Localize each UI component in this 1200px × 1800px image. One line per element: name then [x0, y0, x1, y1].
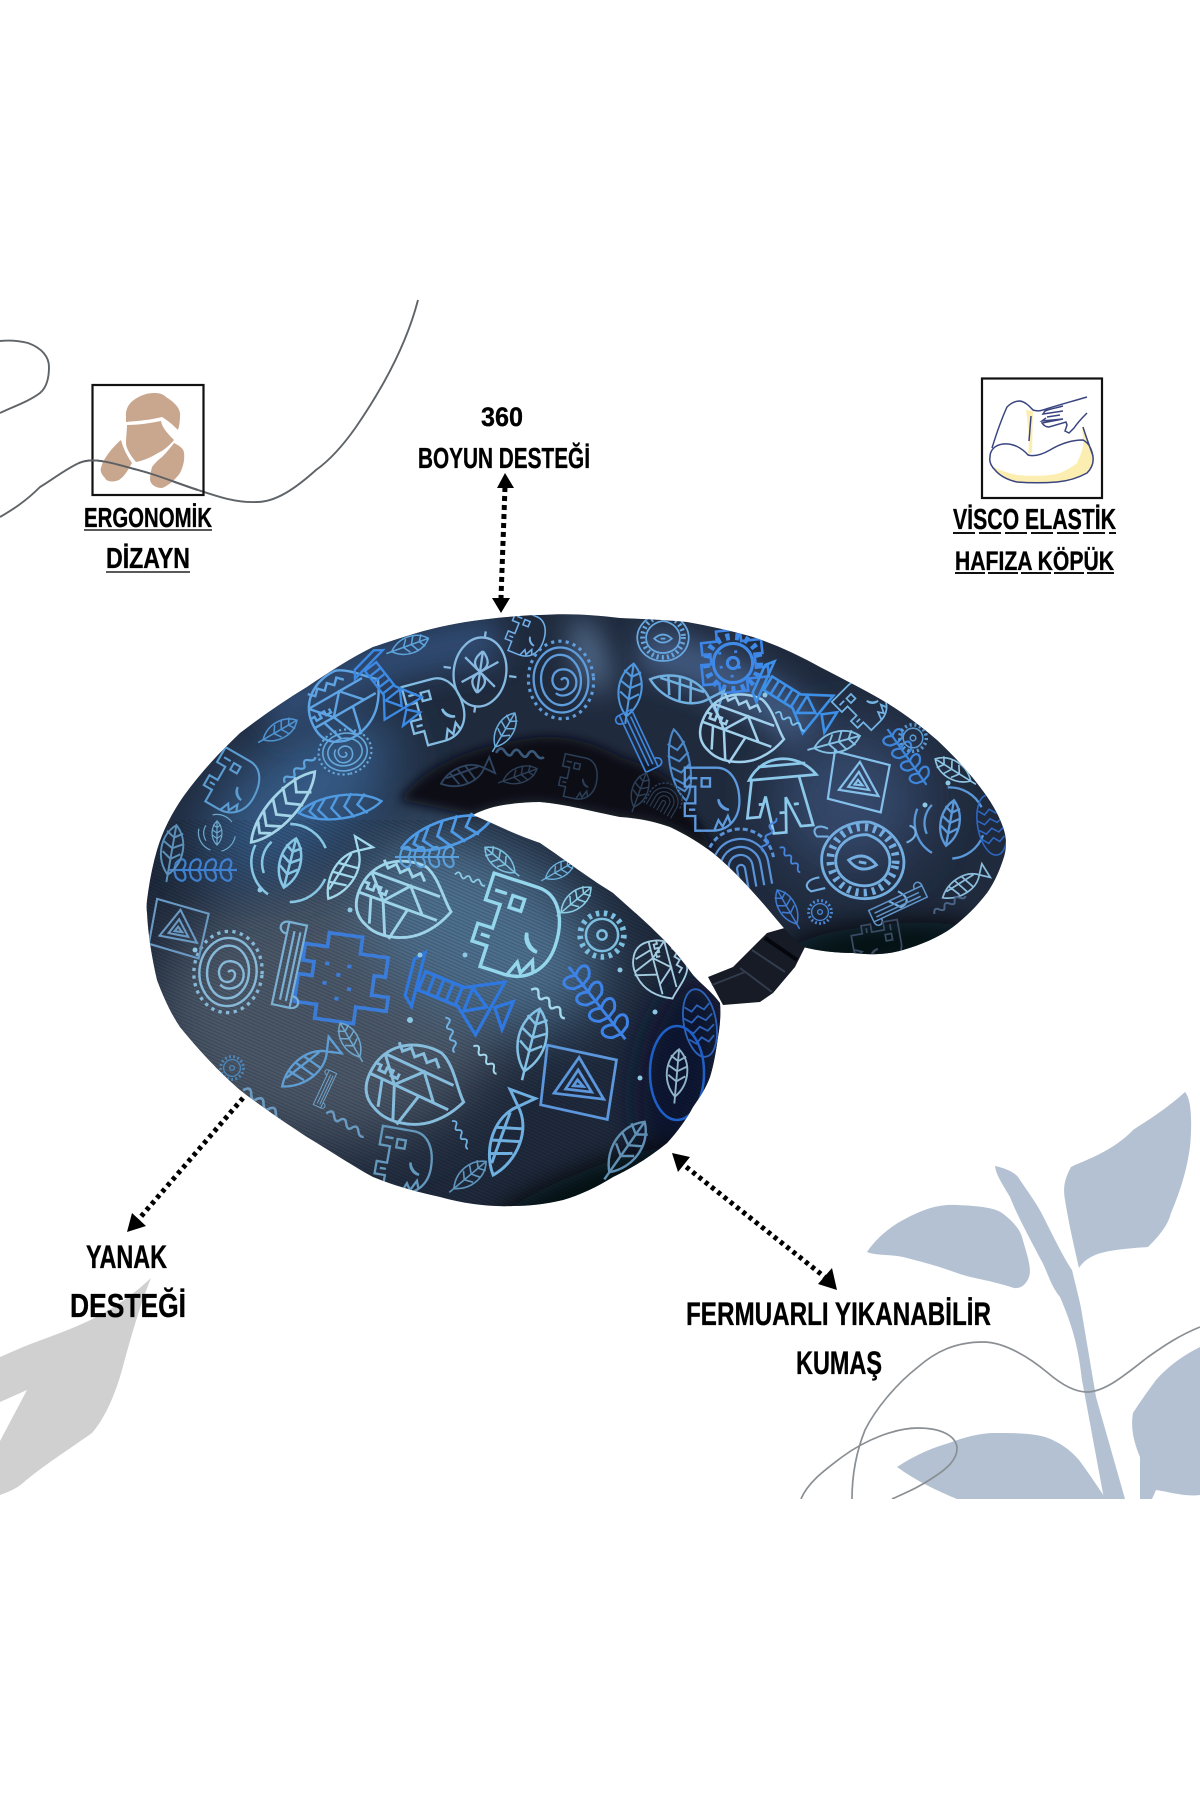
pillow body [147, 614, 1006, 1206]
label: ergonomic design: ERGONOMİK [84, 502, 212, 533]
label: visco elastic memory foam [953, 504, 1116, 576]
label: cheek support: YANAK [86, 1239, 167, 1275]
label: zippered washable fabric: KUMAŞ [796, 1345, 882, 1381]
label: ergonomic design [84, 502, 212, 575]
pattern: inner surface [438, 748, 688, 820]
label: zippered washable fabric: FERMUARLI YIKANABİLİR [686, 1296, 991, 1332]
arrow: neck support [492, 473, 514, 613]
pattern: front arm [148, 747, 722, 1199]
plant: stem [995, 1166, 1125, 1499]
plant: left leaf [867, 1205, 1030, 1288]
infographic canvas [0, 300, 1200, 1499]
label: 360: 360 [481, 402, 523, 432]
decorative grey leaf bottom left [0, 1278, 151, 1495]
pattern: top arc [254, 609, 1011, 969]
decorative thin curve lines bottom right [801, 1327, 1200, 1499]
arrow: zipper washable fabric [672, 1153, 837, 1290]
label: zippered washable fabric [686, 1296, 991, 1381]
pillow strap and buckle [708, 925, 807, 1005]
plant: top leaf [1064, 1092, 1191, 1268]
label: visco elastic memory foam: VİSCO ELASTİK [953, 504, 1116, 536]
label: ergonomic design: DİZAYN [106, 543, 190, 575]
pattern: small dots [192, 692, 950, 1080]
plant: right lower leaf [1132, 1347, 1200, 1499]
label: cheek support: DESTEĞİ [70, 1287, 186, 1324]
pillow product image [130, 609, 1011, 1250]
label: cheek support [70, 1239, 186, 1324]
pillow shading [146, 614, 970, 1206]
decorative thin curve lines top left [0, 300, 418, 517]
label: neck support: BOYUN DESTEĞİ [418, 441, 590, 475]
plant: bottom leaf [897, 1433, 1106, 1499]
decorative blue plant bottom right [867, 1092, 1200, 1499]
arrow: cheek support [127, 1098, 243, 1232]
icon: visco memory foam with hand [982, 378, 1102, 498]
icon: ergonomic head and shoulders [79, 385, 204, 495]
pillow folk-art pattern [148, 609, 1011, 1199]
label: visco elastic memory foam: HAFIZA KÖPÜK [955, 546, 1114, 576]
